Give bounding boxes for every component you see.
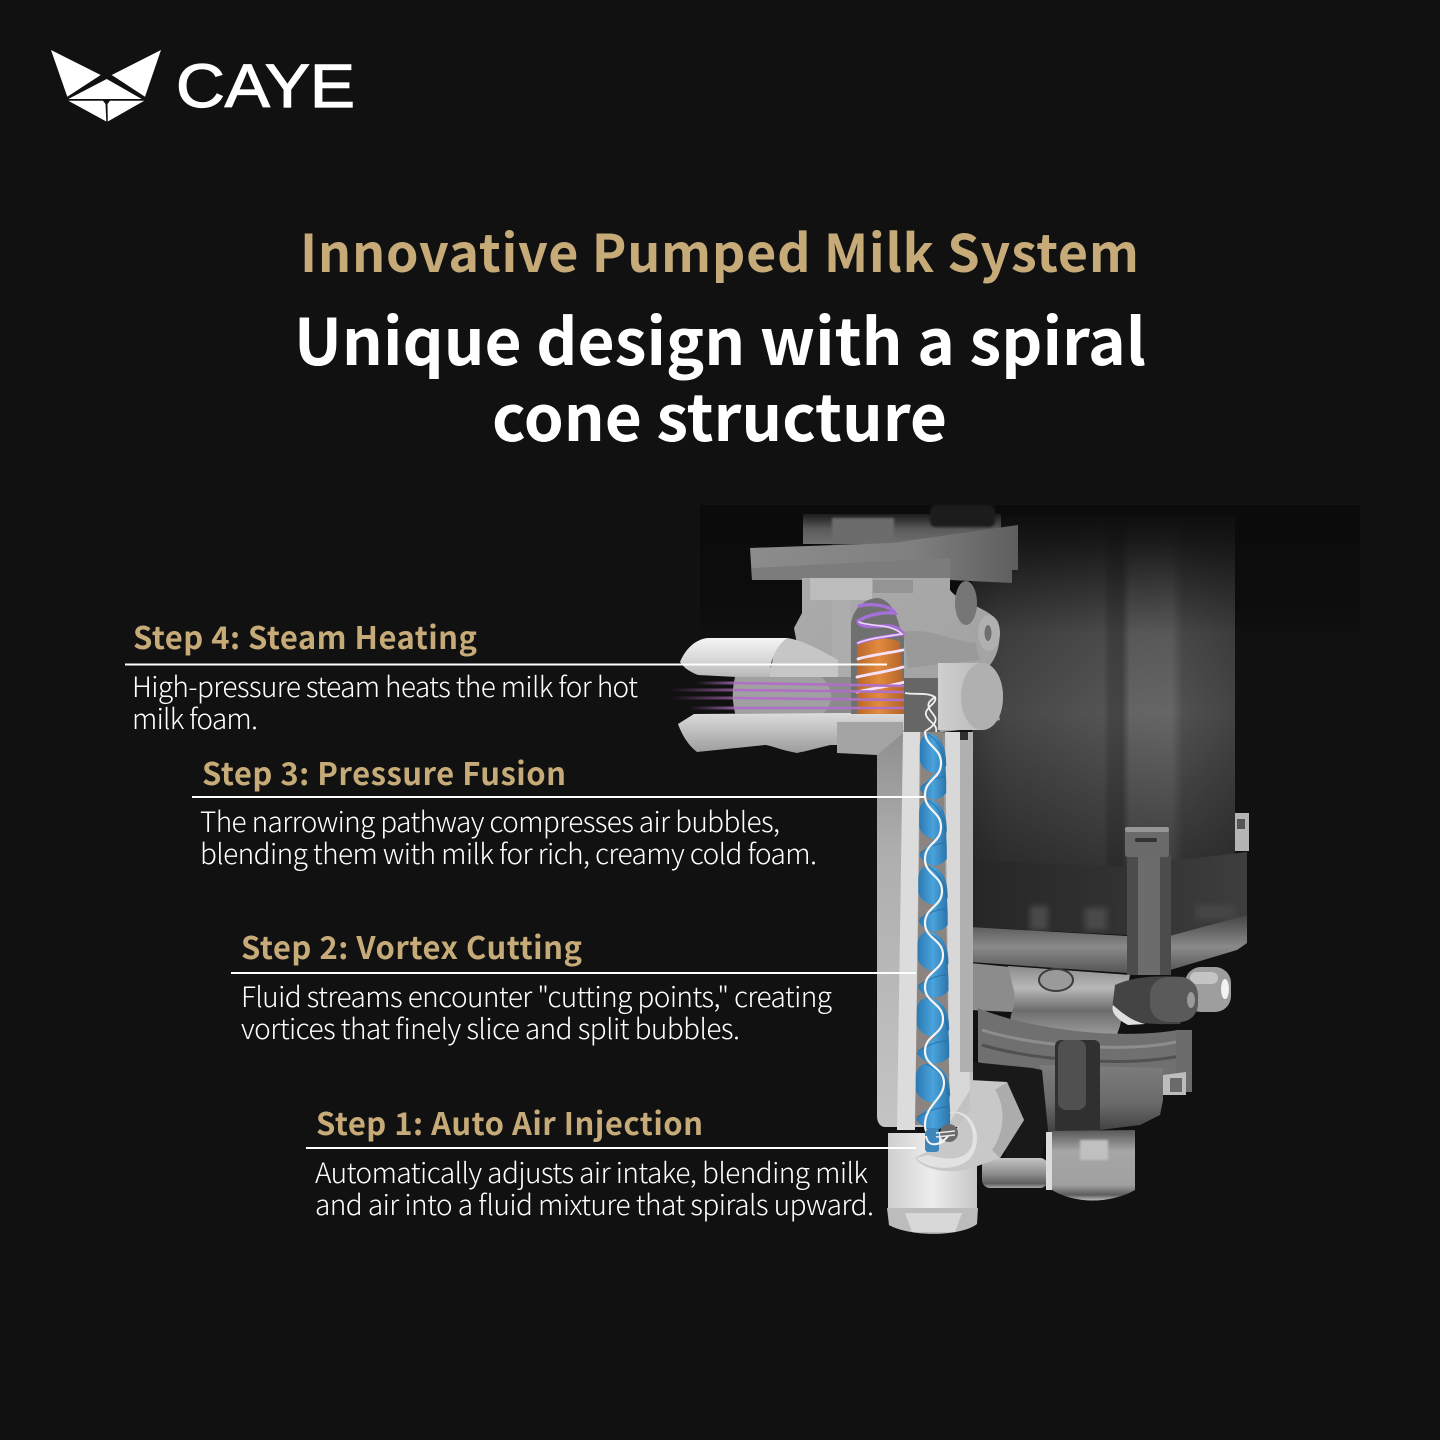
orange core [857, 638, 905, 714]
lower base [1040, 1065, 1163, 1135]
step 1 description: Automatically adjusts air intake, blending milk [315, 1152, 868, 1192]
top mounting flange [750, 505, 1018, 583]
light band [970, 915, 1247, 973]
right inner wall [945, 732, 970, 1122]
icon: winged emblem [51, 50, 161, 122]
thin right column [1176, 1030, 1192, 1092]
dark mount [972, 1062, 1048, 1160]
heating chamber with coil [670, 598, 905, 714]
front right connector [1112, 976, 1197, 1024]
side block [970, 963, 1016, 1012]
back right connector [1185, 967, 1231, 1012]
step 2 leader line [231, 972, 916, 974]
lower translucent housing [970, 827, 1247, 1200]
title: gold heading: Innovative Pumped Milk System [300, 212, 1139, 287]
outer wall [877, 732, 973, 1127]
step 3 description: The narrowing pathway compresses air bubbles, [200, 801, 780, 841]
motor housing [972, 515, 1249, 875]
white swirl line [925, 731, 948, 1140]
right cup [1052, 1130, 1135, 1200]
subtitle: white heading: Unique design with a spiral [294, 292, 1146, 384]
valve body [794, 578, 1000, 752]
braided swirl top [905, 693, 936, 733]
step 4 description: High-pressure steam heats the milk for hot [132, 666, 638, 706]
right cylinder [904, 663, 1003, 733]
step 2 callout [231, 923, 916, 1048]
step 4 callout [125, 613, 887, 738]
logo: CAYE [51, 50, 355, 122]
steam passage [735, 677, 855, 714]
front coil strands [857, 650, 905, 692]
hex nut [887, 1208, 978, 1234]
small nut [1163, 1072, 1186, 1095]
vertical bolt [1127, 855, 1171, 975]
step 1 leader line [306, 1147, 916, 1149]
dark band [970, 852, 1247, 938]
lower disc [978, 1008, 1192, 1082]
side lobe with hole [955, 581, 977, 625]
dark backdrop [700, 505, 1360, 645]
title block [294, 212, 1146, 460]
bottom inlet and nut [887, 1080, 1024, 1234]
nozzle lower wall [678, 713, 915, 753]
elbow fitting [915, 1080, 1024, 1171]
step 1 heading: Step 1: Auto Air Injection [316, 1099, 703, 1144]
step 3 callout [192, 749, 925, 873]
vertical spiral tube [877, 731, 973, 1152]
side screw [1235, 813, 1249, 851]
step 4 leader line [125, 664, 887, 666]
body socket [765, 638, 838, 678]
spiral cone [916, 734, 950, 1152]
chamber cavity [851, 598, 904, 714]
title block: cone structure [492, 368, 947, 460]
steam lines [735, 683, 905, 708]
step 4 description: milk foam. [132, 698, 258, 738]
step 1 description: and air into a fluid mixture that spirals upward. [315, 1184, 874, 1224]
nozzle upper wall [680, 638, 787, 677]
left cup [982, 1158, 1048, 1188]
product cutaway illustration [670, 505, 1360, 1234]
inlet pipe [888, 1133, 977, 1213]
left inner wall [897, 732, 920, 1130]
step 3 heading: Step 3: Pressure Fusion [202, 749, 566, 794]
steam tails [696, 682, 736, 684]
step 2 description: Fluid streams encounter "cutting points," creating [241, 976, 832, 1016]
collars [810, 578, 872, 600]
step 3 leader line [192, 796, 925, 798]
step 2 description: vortices that finely slice and split bubbles. [241, 1008, 740, 1048]
wordmark: CAYE [176, 52, 355, 120]
step 2 heading: Step 2: Vortex Cutting [241, 923, 582, 968]
step 3 description: blending them with milk for rich, creamy cold foam. [200, 833, 817, 873]
purple coil [858, 605, 903, 643]
step 4 heading: Step 4: Steam Heating [133, 613, 477, 658]
bell section [1008, 966, 1130, 1040]
steam nozzle [678, 638, 915, 760]
step 1 callout [306, 1099, 916, 1224]
cavity [915, 732, 950, 1125]
cavity behind cylinder [904, 678, 940, 732]
dark post [1055, 1040, 1100, 1135]
